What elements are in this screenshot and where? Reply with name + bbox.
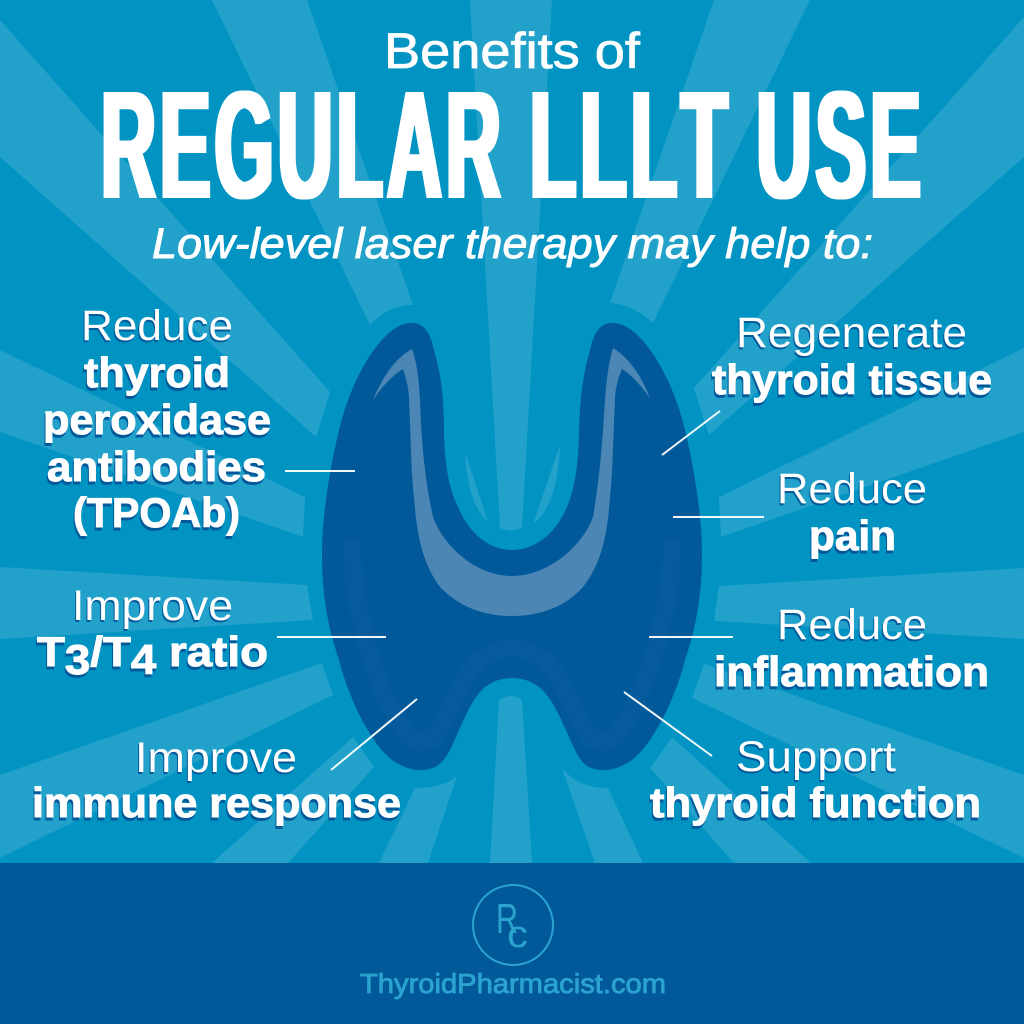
label: regenerate thyroid tissue: Regenerate bbox=[736, 309, 967, 357]
label: improve T3/T4 ratio: 3 bbox=[65, 636, 90, 683]
label: improve T3/T4 ratio: T bbox=[37, 628, 63, 675]
logo: RC monogram: c bbox=[507, 914, 528, 956]
website address: ThyroidPharmacist.com bbox=[360, 968, 666, 999]
label: reduce pain: Reduce bbox=[777, 465, 927, 513]
label: reduce TPOAb: antibodies bbox=[47, 443, 266, 490]
label: improve T3/T4 ratio: /T bbox=[90, 628, 131, 675]
label: reduce pain bbox=[777, 465, 927, 559]
label: reduce TPOAb: thyroid bbox=[84, 349, 230, 396]
label: reduce inflammation: inflammation bbox=[714, 648, 989, 695]
label: reduce inflammation: Reduce bbox=[777, 601, 927, 649]
label: improve T3/T4 ratio: ratio bbox=[156, 628, 268, 675]
label: improve immune response bbox=[32, 734, 401, 826]
label: improve T3/T4 ratio: 4 bbox=[131, 636, 157, 683]
label: improve immune response: Improve bbox=[135, 734, 297, 782]
label: support thyroid function: thyroid function bbox=[650, 779, 981, 826]
title: REGULAR LLLT USE bbox=[101, 59, 925, 231]
heading: benefits of: Benefits of bbox=[384, 23, 640, 79]
label: regenerate thyroid tissue: thyroid tissue bbox=[712, 356, 992, 403]
label: reduce inflammation bbox=[714, 601, 989, 695]
label: improve immune response: immune response bbox=[32, 779, 401, 826]
footer band bbox=[0, 863, 1024, 1024]
label: reduce TPOAb: Reduce bbox=[81, 302, 233, 350]
label: support thyroid function: Support bbox=[736, 733, 896, 781]
label: reduce TPOAb bbox=[43, 302, 271, 536]
thyroid illustration bbox=[322, 323, 702, 770]
subtitle: Low-level laser therapy may help to: bbox=[152, 220, 873, 268]
label: improve T3/T4 ratio: Improve bbox=[72, 582, 233, 630]
label: reduce TPOAb: (TPOAb) bbox=[73, 489, 240, 536]
label: reduce TPOAb: peroxidase bbox=[43, 396, 271, 443]
label: regenerate thyroid tissue bbox=[712, 309, 992, 403]
logo: RC monogram: R bbox=[496, 895, 518, 942]
label: reduce pain: pain bbox=[809, 512, 896, 559]
logo: RC monogram bbox=[473, 885, 553, 965]
label: support thyroid function bbox=[650, 733, 981, 826]
label: improve T3/T4 ratio bbox=[37, 582, 268, 683]
connector lines bbox=[277, 411, 764, 770]
